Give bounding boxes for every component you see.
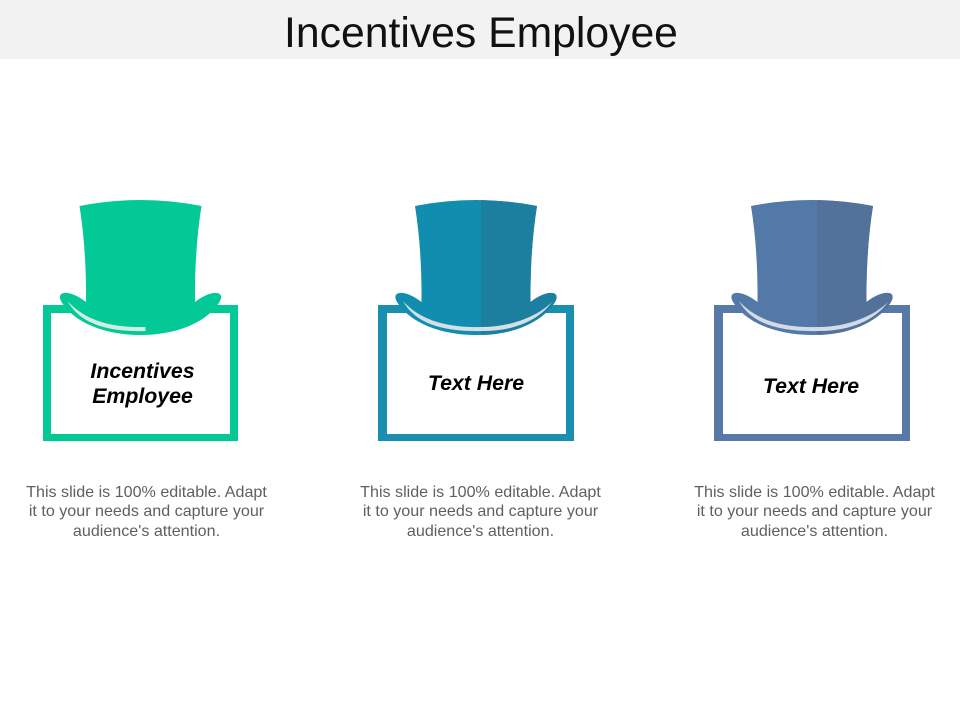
label 1: Employee bbox=[92, 384, 193, 408]
description 1 bbox=[26, 483, 267, 540]
description 2: audience's attention. bbox=[407, 522, 554, 540]
description 2 bbox=[360, 483, 601, 540]
icon: slate top hat bbox=[731, 200, 893, 335]
panel: text here middle bbox=[360, 200, 601, 540]
description 1: it to your needs and capture your bbox=[29, 502, 265, 520]
description 3: This slide is 100% editable. Adapt bbox=[694, 483, 935, 501]
label 2: Text Here bbox=[428, 371, 524, 395]
description 2: This slide is 100% editable. Adapt bbox=[360, 483, 601, 501]
icon: blue top hat bbox=[395, 200, 557, 335]
description 1: This slide is 100% editable. Adapt bbox=[26, 483, 267, 501]
label 1 bbox=[90, 359, 195, 408]
frame 1 bbox=[43, 305, 238, 441]
panel: incentives employee bbox=[26, 200, 267, 540]
title band bbox=[0, 0, 960, 59]
description 2: it to your needs and capture your bbox=[363, 502, 599, 520]
label 1: Incentives bbox=[90, 359, 195, 383]
frame 2 bbox=[378, 305, 574, 441]
title: Incentives Employee bbox=[284, 9, 678, 57]
description 1: audience's attention. bbox=[73, 522, 220, 540]
frame 3 bbox=[714, 305, 910, 441]
description 3 bbox=[694, 483, 935, 540]
icon: green top hat bbox=[60, 200, 221, 335]
description 3: audience's attention. bbox=[741, 522, 888, 540]
panel: text here right bbox=[694, 200, 935, 540]
description 3: it to your needs and capture your bbox=[697, 502, 933, 520]
label 3: Text Here bbox=[763, 374, 859, 398]
